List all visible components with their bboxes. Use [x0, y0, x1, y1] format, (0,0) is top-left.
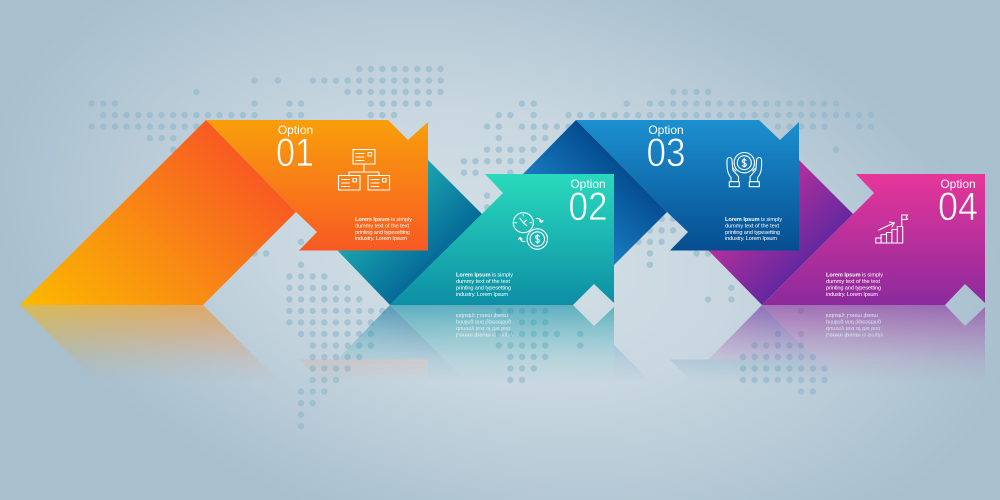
text block 03: dummy text of the text — [725, 224, 779, 230]
panel 4: purple back fold — [708, 160, 853, 305]
text block 04: Lorem Ipsum is simply — [826, 273, 883, 279]
panel 3: blue arrow band — [523, 120, 667, 265]
icon: clock and coin — [513, 213, 548, 249]
text block 04: industry. Lorem Ipsum — [826, 292, 878, 298]
text block 03: industry. Lorem Ipsum — [725, 236, 777, 242]
option 01 heading: Option — [278, 123, 313, 137]
text block 04: dummy text of the text — [826, 279, 880, 285]
panel 4: magenta front — [762, 174, 985, 305]
panel 2: teal back fold — [337, 160, 482, 305]
option 04 heading: 04 — [938, 185, 978, 229]
text block 02 — [456, 273, 513, 298]
panel 2: teal front — [390, 174, 614, 305]
text block 03: printing and typesetting — [725, 230, 780, 236]
text block 03 — [725, 217, 782, 242]
option 02 heading: 02 — [568, 185, 608, 229]
text block 04 — [826, 273, 883, 298]
dotted world map — [92, 69, 871, 426]
option 04 heading: Option — [940, 177, 976, 191]
panel 1: orange banner — [206, 120, 428, 250]
icon: organisation chart — [338, 150, 390, 190]
text block 01: printing and typesetting — [355, 230, 410, 236]
option 03 heading: Option — [648, 123, 684, 137]
text block 02: Lorem Ipsum is simply — [456, 273, 513, 279]
reflection of arrows — [20, 305, 985, 373]
text block 03: Lorem Ipsum is simply — [725, 217, 782, 223]
text block 01 — [355, 217, 412, 242]
panel 3: blue banner — [576, 120, 799, 250]
option 02 heading: Option — [570, 177, 606, 191]
icon: growth chart with flag — [876, 215, 908, 243]
text block 01: industry. Lorem Ipsum — [355, 236, 407, 242]
text block 01: Lorem Ipsum is simply — [355, 217, 412, 223]
option 03 heading: 03 — [646, 131, 686, 175]
icon: hands holding coin — [727, 152, 762, 187]
panel 1: orange arrow band — [20, 120, 296, 305]
text block 02: industry. Lorem Ipsum — [456, 292, 508, 298]
text block 02: dummy text of the text — [456, 279, 510, 285]
text block 04: printing and typesetting — [826, 286, 881, 292]
panel shapes: all four arrows — [20, 120, 985, 305]
text block 02: printing and typesetting — [456, 286, 511, 292]
text block 01: dummy text of the text — [355, 224, 409, 230]
option 01 heading: 01 — [276, 131, 314, 175]
